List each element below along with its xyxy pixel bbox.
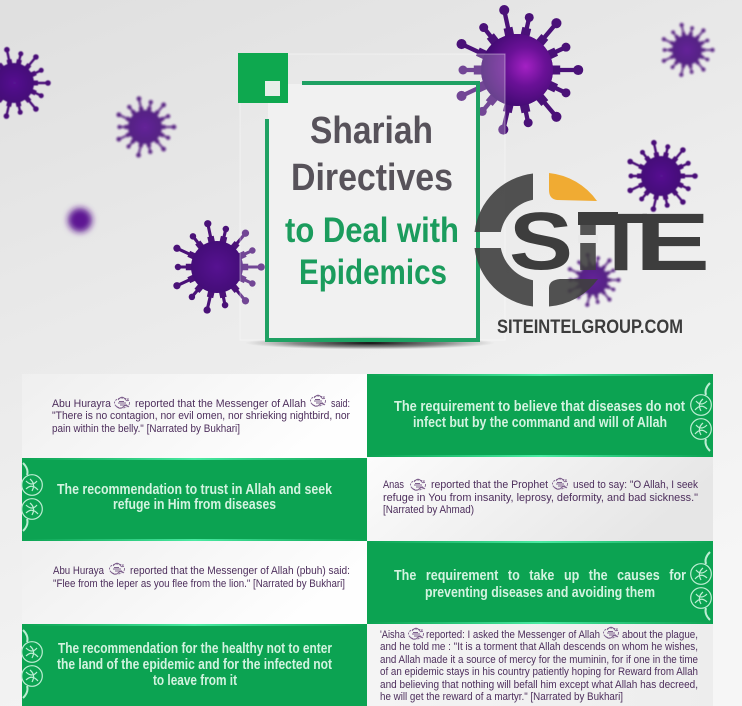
SITE logo bbox=[474, 173, 710, 338]
card shadow bbox=[245, 336, 495, 350]
panel: row 4 right quote: about the plague, bbox=[622, 629, 698, 641]
panel: row 2 left recommendation: The recommendation to trust in Allah and seek bbox=[57, 482, 333, 498]
panel: row 3 left quote bbox=[22, 541, 367, 624]
virus: large lower left of card bbox=[173, 220, 265, 314]
panel: row 2 left recommendation bbox=[22, 458, 367, 541]
panel: row 1 left quote: reported that the Messenger of Allah bbox=[135, 398, 306, 410]
panel: row 2 right quote: refuge in You from insanity, leprosy, deformity, and bad sickness." bbox=[383, 492, 698, 504]
title card bbox=[238, 53, 505, 350]
virus: large top centre bbox=[457, 5, 583, 135]
panel: row 4 right quote: 'Aisha bbox=[380, 629, 406, 641]
logo ring bbox=[474, 174, 598, 306]
panel: row 2 right quote: Anas bbox=[383, 479, 404, 491]
title text: Directives bbox=[291, 157, 453, 199]
virus: blurred small left bbox=[68, 208, 92, 232]
panel: row 3 right requirement bbox=[367, 541, 713, 624]
logo letters: S bbox=[509, 196, 573, 287]
panel: row 1 left quote bbox=[22, 374, 367, 458]
title text bbox=[285, 110, 459, 292]
panel: row 4 right quote: and believing that nothing will befall him except what Allah has decreed, bbox=[380, 679, 698, 691]
title text: to Deal with bbox=[285, 211, 459, 250]
virus: right bbox=[627, 140, 698, 212]
panel: row 1 right requirement bbox=[367, 374, 713, 457]
panel: row 3 left quote: reported that the Messenger of Allah (pbuh) said: bbox=[130, 565, 350, 577]
logo letters: T bbox=[594, 197, 648, 288]
panel: row 3 left quote: Abu Huraya bbox=[53, 565, 105, 577]
panel: row 2 right quote bbox=[367, 457, 713, 541]
panel: row 3 left quote: "Flee from the leper as you flee from the lion." [Narrated by Bukhari] bbox=[53, 578, 345, 590]
panel: row 4 left recommendation bbox=[22, 624, 367, 706]
panel: row 4 right quote: he will get the reward of a martyr." [Narrated by Bukhari] bbox=[380, 691, 623, 703]
title text: Epidemics bbox=[299, 253, 447, 292]
virus: blurred top right bbox=[662, 23, 715, 77]
panel: row 3 right requirement: The requirement to take up the causes for bbox=[394, 568, 686, 584]
card panel bbox=[240, 54, 505, 340]
panel: row 1 left quote: said: bbox=[331, 398, 350, 410]
panel: row 4 left recommendation: The recommendation for the healthy not to enter bbox=[58, 641, 332, 657]
logo letters bbox=[509, 196, 710, 288]
panel: row 4 left recommendation: the land of the epidemic and for the infected not bbox=[57, 657, 332, 673]
panel: row 1 right requirement: infect but by the command and will of Allah bbox=[413, 415, 667, 431]
logo letters: I bbox=[573, 197, 603, 288]
panel: row 2 right quote: reported that the Prophet bbox=[431, 479, 548, 491]
panel: row 2 left recommendation: refuge in Him from diseases bbox=[113, 497, 276, 513]
logo letters: E bbox=[635, 197, 710, 288]
panel: row 4 right quote: and Allah made it a source of mercy for the muminin, for if one in the time bbox=[380, 654, 698, 666]
panel: row 3 right requirement: preventing diseases and avoiding them bbox=[425, 585, 655, 601]
panel: row 4 right quote: reported: I asked the Messenger of Allah bbox=[426, 629, 600, 641]
panel: row 1 left quote: pain within the belly." [Narrated by Bukhari] bbox=[52, 423, 240, 435]
panel: row 4 right quote bbox=[367, 624, 713, 706]
panel: row 4 left recommendation: to leave from it bbox=[153, 673, 237, 689]
panel: row 1 left quote: Abu Hurayra bbox=[52, 398, 112, 410]
title text: Shariah bbox=[310, 110, 433, 152]
panel: row 2 right quote: used to say: "O Allah, I seek bbox=[573, 479, 698, 491]
panel: row 4 right quote: of an epidemic stays in his country patiently hoping for Reward from Allah bbox=[380, 666, 698, 678]
logo url: SITEINTELGROUP.COM bbox=[497, 316, 683, 338]
panel: row 1 left quote: "There is no contagion, nor evil omen, nor shrieking nightbird, nor bbox=[52, 410, 350, 422]
panel: row 1 right requirement: The requirement to believe that diseases do not bbox=[394, 399, 685, 415]
panel: row 4 right quote: and he told me : "It is a torment that Allah descends on whom he wishes, bbox=[380, 641, 698, 653]
virus: behind logo bbox=[568, 253, 621, 307]
green frame bbox=[267, 83, 478, 340]
green corner square bbox=[238, 53, 288, 103]
virus: top left bbox=[0, 47, 51, 119]
panel: row 2 right quote: [Narrated by Ahmad) bbox=[383, 504, 474, 516]
virus: blurred upper left bbox=[116, 96, 176, 158]
